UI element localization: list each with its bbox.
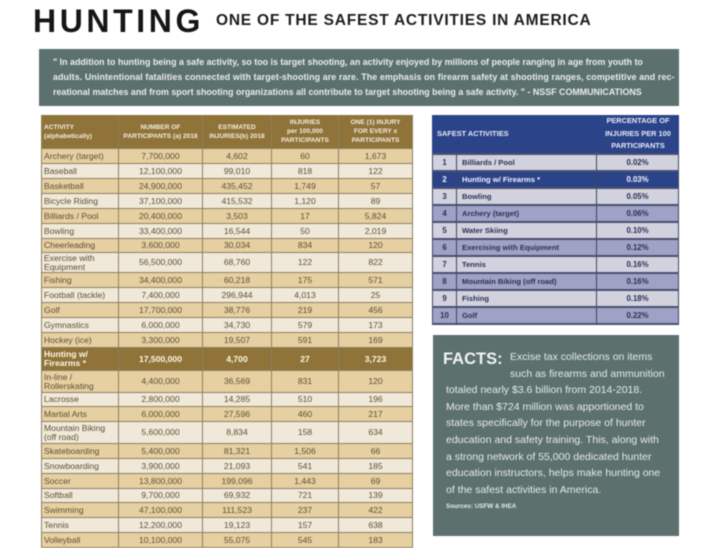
table: injuries by activity: 17 <box>300 210 310 220</box>
table: safest activities: 0.06% <box>626 209 649 218</box>
table: injuries by activity: 34,730 <box>224 320 250 330</box>
table: safest activities: 0.10% <box>626 226 649 235</box>
table: safest activities: 0.18% <box>626 294 649 303</box>
table header: PARTICIPANTS (a) 2018 <box>123 132 198 140</box>
highlighted row: hunting: 27 <box>300 354 310 364</box>
table: injuries by activity: 37,100,000 <box>139 196 182 206</box>
table: injuries by activity: 5,400,000 <box>141 446 180 456</box>
panel: facts: Excise tax collections on items <box>510 351 652 363</box>
panel: facts: More than $724 million was apportioned to <box>446 401 644 413</box>
panel: facts: education instructors, helps make hunting one <box>446 467 660 479</box>
table: injuries by activity: Martial Arts <box>44 408 87 418</box>
highlighted row: hunting: 0.03% <box>626 175 649 184</box>
table: injuries by activity: 158 <box>298 427 312 437</box>
table: injuries by activity: Rollerskating <box>44 380 94 390</box>
panel: facts: such as firearms and ammunition <box>510 368 665 380</box>
table: injuries by activity: 10,100,000 <box>139 534 182 544</box>
panel: facts <box>433 335 679 536</box>
table: injuries by activity: 175 <box>298 274 312 284</box>
table: injuries by activity <box>40 114 414 548</box>
panel: facts: FACTS: <box>443 350 503 368</box>
table: injuries by activity: Soccer <box>44 476 71 486</box>
table: injuries by activity: Football (tackle) <box>44 290 105 300</box>
panel: facts: states specifically for the purpose of hunter <box>446 417 646 429</box>
table header: SAFEST ACTIVITIES <box>437 129 509 138</box>
table: injuries by activity: Golf <box>44 304 60 314</box>
table: injuries by activity: Cheerleading <box>44 240 95 250</box>
table: injuries by activity: 1,673 <box>365 150 386 160</box>
panel: facts: a strong network of 55,000 dedicated hunter <box>446 451 651 463</box>
table: safest activities: Tennis <box>462 260 486 269</box>
title: HUNTING <box>33 3 204 39</box>
table: injuries by activity: 3,900,000 <box>141 460 180 470</box>
table: injuries by activity: 422 <box>368 504 383 514</box>
table: injuries by activity: Volleyball <box>44 534 80 544</box>
table: injuries by activity: 47,100,000 <box>139 504 182 514</box>
table: injuries by activity: 822 <box>368 257 383 267</box>
table header: PARTICIPANTS <box>611 141 665 150</box>
table: injuries by activity: 34,400,000 <box>139 274 182 284</box>
table: injuries by activity: 111,523 <box>222 504 252 514</box>
highlighted row: hunting: 3,723 <box>365 354 386 364</box>
table header <box>40 114 414 150</box>
table: safest activities: 5 <box>442 226 447 235</box>
highlighted row: hunting: Firearms * <box>44 358 86 368</box>
table: injuries by activity: Swimming <box>44 504 84 514</box>
table: injuries by activity: 196 <box>368 394 383 404</box>
table header: INJURIES <box>290 119 320 126</box>
table: injuries by activity: 27,596 <box>224 408 250 418</box>
table: injuries by activity: 38,776 <box>224 304 250 314</box>
table: injuries by activity: Skateboarding <box>44 446 99 456</box>
table: injuries by activity: 13,800,000 <box>139 476 182 486</box>
table: injuries by activity: 68,760 <box>224 257 250 267</box>
table: safest activities: 7 <box>442 260 447 269</box>
table: injuries by activity: Softball <box>44 490 73 500</box>
table: injuries by activity: 3,600,000 <box>141 240 180 250</box>
table: injuries by activity: 217 <box>368 408 383 418</box>
table: injuries by activity: 3,300,000 <box>141 334 180 344</box>
table: injuries by activity: 169 <box>368 334 383 344</box>
table: injuries by activity: 157 <box>298 520 312 530</box>
table: injuries by activity: 199,096 <box>221 476 253 486</box>
table: injuries by activity: 5,600,000 <box>141 427 180 437</box>
table: injuries by activity: 24,900,000 <box>139 180 182 190</box>
table: injuries by activity: Tennis <box>44 520 69 530</box>
table: injuries by activity: 2,019 <box>365 226 386 236</box>
table: injuries by activity: (off road) <box>44 432 79 442</box>
table: injuries by activity: 19,123 <box>224 520 250 530</box>
table: injuries by activity: 7,400,000 <box>141 290 180 300</box>
highlighted row: hunting: 2 <box>442 175 447 184</box>
table: injuries by activity: 1,506 <box>294 446 316 456</box>
highlighted row: hunting: Hunting w/ <box>44 349 88 359</box>
table: injuries by activity: Lacrosse <box>44 394 79 404</box>
table: injuries by activity: 12,100,000 <box>139 166 182 176</box>
table: safest activities: Fishing <box>462 294 489 303</box>
panel: target shooting note <box>39 49 679 106</box>
table: safest activities: Water Skiing <box>462 226 508 235</box>
table header: ACTIVITY <box>44 124 74 130</box>
table: safest activities: 0.12% <box>626 243 649 252</box>
table: safest activities: Exercising with Equipment <box>462 243 559 252</box>
highlighted row: hunting: 4,700 <box>226 354 248 364</box>
table: injuries by activity: 9,700,000 <box>141 490 180 500</box>
panel: facts: Sources: USFW & IHEA <box>446 503 516 510</box>
table: injuries by activity: 818 <box>298 166 312 176</box>
table: injuries by activity: 296,944 <box>221 290 253 300</box>
table: injuries by activity: 56,500,000 <box>139 257 182 267</box>
table: injuries by activity: 4,400,000 <box>141 376 180 386</box>
subtitle: ONE OF THE SAFEST ACTIVITIES IN AMERICA <box>216 12 591 29</box>
table: injuries by activity: 99,010 <box>224 166 250 176</box>
table: injuries by activity: 36,569 <box>224 376 250 386</box>
table: injuries by activity: 57 <box>371 180 380 190</box>
table: injuries by activity: Snowboarding <box>44 460 99 470</box>
table: injuries by activity: 69 <box>371 476 380 486</box>
table: injuries by activity: 831 <box>298 376 312 386</box>
table: safest activities: Golf <box>462 311 477 320</box>
table: injuries by activity: 7,700,000 <box>141 150 180 160</box>
panel: facts: education and safety training. This, along with <box>446 434 659 446</box>
table: injuries by activity: 460 <box>298 408 312 418</box>
table header: per 100,000 <box>287 128 323 135</box>
table: safest activities <box>431 114 680 326</box>
table: injuries by activity: 834 <box>298 240 312 250</box>
table header: PARTICIPANTS <box>281 137 329 144</box>
table: injuries by activity: 173 <box>368 320 383 330</box>
table: injuries by activity: Hockey (ice) <box>44 334 92 344</box>
table: injuries by activity: 12,200,000 <box>139 520 182 530</box>
table: injuries by activity: 237 <box>298 504 312 514</box>
table: injuries by activity: 19,507 <box>224 334 250 344</box>
panel: target shooting note: adults. Unintentional fatalities connected with target-shooting are rare. The emphasis on firearm safety at shooting ranges, competitive and rec- <box>53 72 675 82</box>
table: injuries by activity: 50 <box>300 226 310 236</box>
table: injuries by activity: 81,321 <box>224 446 250 456</box>
table: injuries by activity: Billiards / Pool <box>44 210 98 220</box>
panel: target shooting note: reational matches and from sport shooting organizations all contribute to target shooting being a safe activity. " - NSSF COMMUNICATIONS <box>53 87 642 97</box>
table: safest activities: 1 <box>442 158 447 167</box>
table: safest activities: 6 <box>442 243 447 252</box>
table header: FOR EVERY x <box>354 128 397 135</box>
table: injuries by activity: 638 <box>368 520 383 530</box>
table: injuries by activity: 4,602 <box>226 150 248 160</box>
table: safest activities: 4 <box>442 209 447 218</box>
table header: NUMBER OF <box>141 124 180 130</box>
table: safest activities: 0.22% <box>626 311 649 320</box>
table: safest activities: Bowling <box>462 192 492 201</box>
table: safest activities: 10 <box>440 311 449 320</box>
table: injuries by activity: Fishing <box>44 274 72 284</box>
table: injuries by activity: 122 <box>298 257 312 267</box>
table: injuries by activity: 456 <box>368 304 383 314</box>
table: safest activities: Mountain Biking (off road) <box>462 277 556 286</box>
table: safest activities: Billiards / Pool <box>462 158 515 167</box>
table header: (alphabetically) <box>44 132 92 140</box>
highlighted row: hunting: 17,500,000 <box>139 354 182 364</box>
table: injuries by activity: Gymnastics <box>44 320 89 330</box>
table: injuries by activity: 185 <box>368 460 383 470</box>
table header: PARTICIPANTS <box>352 137 399 144</box>
table: injuries by activity: 55,075 <box>224 534 250 544</box>
table: injuries by activity: Basketball <box>44 180 84 190</box>
table: injuries by activity: 60,218 <box>224 274 250 284</box>
table header: INJURIES PER 100 <box>605 129 671 138</box>
table: injuries by activity: 122 <box>368 166 383 176</box>
table: injuries by activity: 6,000,000 <box>141 408 180 418</box>
table: injuries by activity: 17,700,000 <box>139 304 182 314</box>
table: injuries by activity: Equipment <box>44 262 85 272</box>
table header: PERCENTAGE OF <box>606 116 670 125</box>
table: injuries by activity: 33,400,000 <box>139 226 182 236</box>
table: safest activities: 0.05% <box>626 192 649 201</box>
table: injuries by activity: 30,034 <box>224 240 250 250</box>
table: injuries by activity: 591 <box>298 334 312 344</box>
table: injuries by activity: Bowling <box>44 226 74 236</box>
table: injuries by activity: 3,503 <box>226 210 248 220</box>
table: injuries by activity: 721 <box>298 490 312 500</box>
table: injuries by activity: 571 <box>368 274 383 284</box>
table: injuries by activity: 25 <box>371 290 380 300</box>
table: injuries by activity: 4,013 <box>294 290 316 300</box>
table: injuries by activity: 89 <box>371 196 380 206</box>
table: injuries by activity: 139 <box>368 490 383 500</box>
table: injuries by activity: 545 <box>298 534 312 544</box>
table: safest activities: Archery (target) <box>462 209 519 218</box>
table: injuries by activity: 66 <box>371 446 380 456</box>
table: injuries by activity: 20,400,000 <box>139 210 182 220</box>
table: safest activities: 0.16% <box>626 260 649 269</box>
table: injuries by activity: Mountain Biking <box>44 422 105 432</box>
table: injuries by activity: 435,452 <box>221 180 253 190</box>
table: injuries by activity: 1,443 <box>294 476 316 486</box>
table: safest activities: 0.16% <box>626 277 649 286</box>
table: injuries by activity: 579 <box>298 320 312 330</box>
table header: INJURIES(b) 2018 <box>209 132 265 140</box>
table: injuries by activity: 69,932 <box>224 490 250 500</box>
table: injuries by activity: 8,834 <box>226 427 248 437</box>
table: injuries by activity: 5,824 <box>365 210 386 220</box>
table: injuries by activity: 1,749 <box>294 180 316 190</box>
table: injuries by activity: 219 <box>298 304 312 314</box>
table: injuries by activity: 120 <box>368 240 383 250</box>
table: safest activities: 3 <box>442 192 447 201</box>
table: injuries by activity: 2,800,000 <box>141 394 180 404</box>
table: injuries by activity: 21,093 <box>224 460 250 470</box>
table: injuries by activity: 510 <box>298 394 312 404</box>
table: safest activities: 8 <box>442 277 447 286</box>
highlighted row: hunting <box>40 347 414 372</box>
table: injuries by activity: 14,285 <box>224 394 250 404</box>
table: injuries by activity: 60 <box>300 150 310 160</box>
highlighted row: hunting: Hunting w/ Firearms * <box>462 175 540 184</box>
table: injuries by activity: 415,532 <box>221 196 253 206</box>
table: safest activities: 9 <box>442 294 447 303</box>
table header <box>431 114 680 156</box>
table: injuries by activity: 183 <box>368 534 383 544</box>
table header: ESTIMATED <box>218 124 256 130</box>
panel: facts: of the safest activities in America. <box>446 484 601 496</box>
table: injuries by activity: 16,544 <box>224 226 250 236</box>
table: injuries by activity: Bicycle Riding <box>44 196 98 206</box>
table: injuries by activity: 1,120 <box>294 196 316 206</box>
table: injuries by activity: 541 <box>298 460 312 470</box>
table: injuries by activity: 120 <box>368 376 383 386</box>
table: safest activities: 0.02% <box>626 158 649 167</box>
panel: target shooting note: " In addition to hunting being a safe activity, so too is target shooting, an activity enjoyed by millions of people ranging in age from youth to <box>53 57 643 67</box>
panel: facts: totaled nearly $3.6 billion from 2014-2018. <box>446 384 642 396</box>
table header: ONE (1) INJURY <box>351 119 400 126</box>
table: injuries by activity: In-line / <box>44 372 72 382</box>
highlighted row: hunting <box>431 171 680 190</box>
table: injuries by activity: 634 <box>368 427 383 437</box>
table: injuries by activity: Archery (target) <box>44 150 104 160</box>
table: injuries by activity: Baseball <box>44 166 77 176</box>
table: injuries by activity: 6,000,000 <box>141 320 180 330</box>
